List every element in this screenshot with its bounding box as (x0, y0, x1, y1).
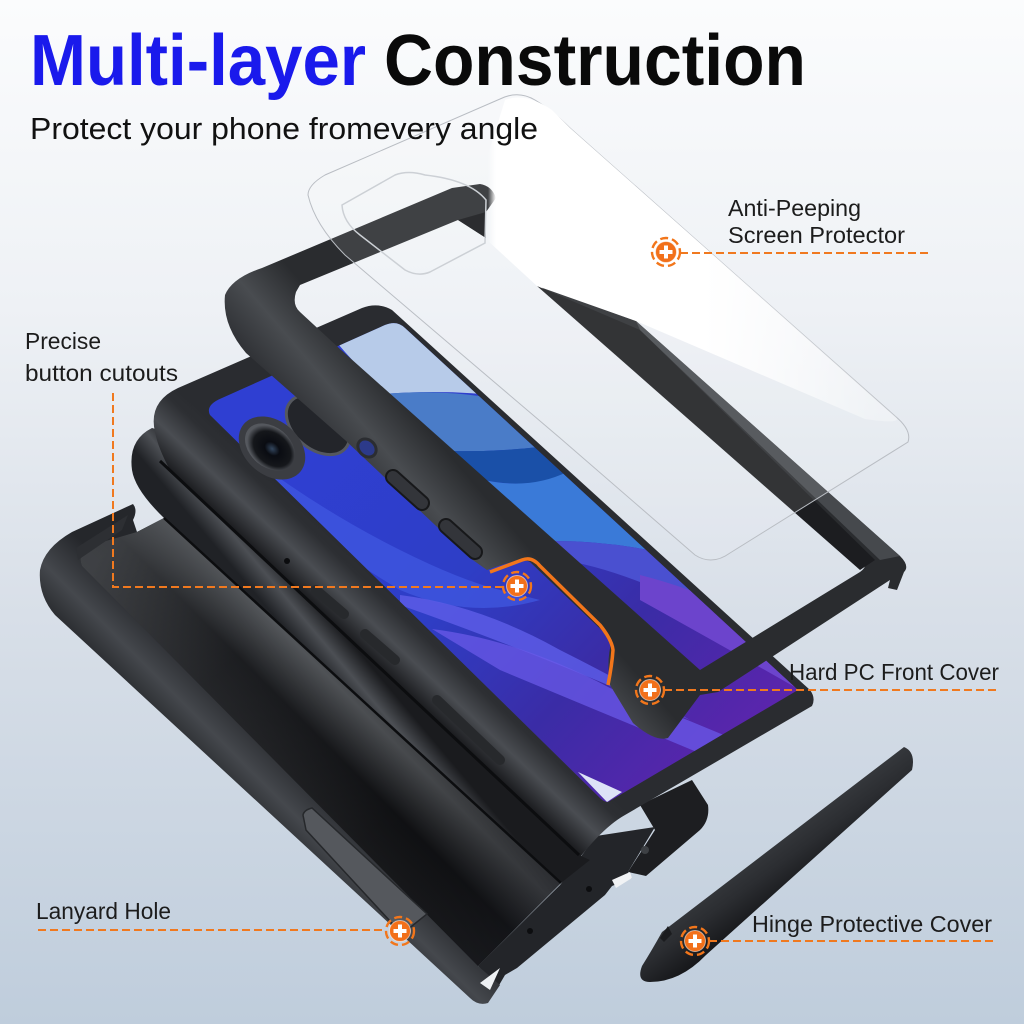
transparent screen protector (308, 95, 909, 560)
glass camera cutout (342, 172, 486, 274)
callout: lanyard hole (36, 898, 414, 945)
glass reflection (480, 98, 897, 421)
title: Construction (384, 21, 806, 101)
back case (40, 504, 561, 1004)
hinge gap line (160, 461, 579, 855)
phone body frame (154, 305, 814, 880)
grip lip (76, 515, 128, 560)
callout: hinge cover: Hinge Protective Cover (752, 911, 992, 937)
microphone dot (284, 558, 290, 564)
back case panel (81, 518, 561, 966)
callout: lanyard hole: Lanyard Hole (36, 898, 171, 924)
side buttons (316, 590, 500, 760)
callout: button cutouts: Precise (25, 328, 101, 354)
hard PC front cover (225, 184, 906, 739)
callout: button cutouts (25, 328, 531, 600)
back case rim (40, 504, 561, 1004)
rear camera lens (226, 404, 318, 492)
far-side rail shading (537, 286, 875, 570)
rear camera second (275, 383, 361, 467)
bottom clip (480, 968, 500, 990)
title: Multi-layer (30, 21, 366, 101)
subtitle: Protect your phone fromevery angle (30, 111, 538, 146)
callout: front cover: Hard PC Front Cover (789, 659, 999, 685)
callout: hinge cover (681, 911, 993, 955)
callout: screen protector: Anti-Peeping (728, 195, 861, 221)
callout: front cover (636, 659, 1000, 704)
glass sheet (308, 95, 909, 560)
orange highlight edge (490, 559, 613, 685)
title (30, 21, 806, 101)
cut-out buttons (354, 435, 475, 552)
callout: button cutouts: button cutouts (25, 360, 178, 386)
callout: screen protector: Screen Protector (728, 222, 905, 248)
hinge mechanism of the phone (478, 780, 708, 987)
phone front with screen (154, 300, 820, 880)
screen wallpaper (208, 323, 797, 802)
phone lower body band (131, 428, 590, 883)
callout: screen protector (652, 195, 930, 266)
hinge protective cover (640, 747, 913, 982)
arm end inner shadow (458, 212, 486, 238)
lanyard strap (303, 808, 427, 934)
